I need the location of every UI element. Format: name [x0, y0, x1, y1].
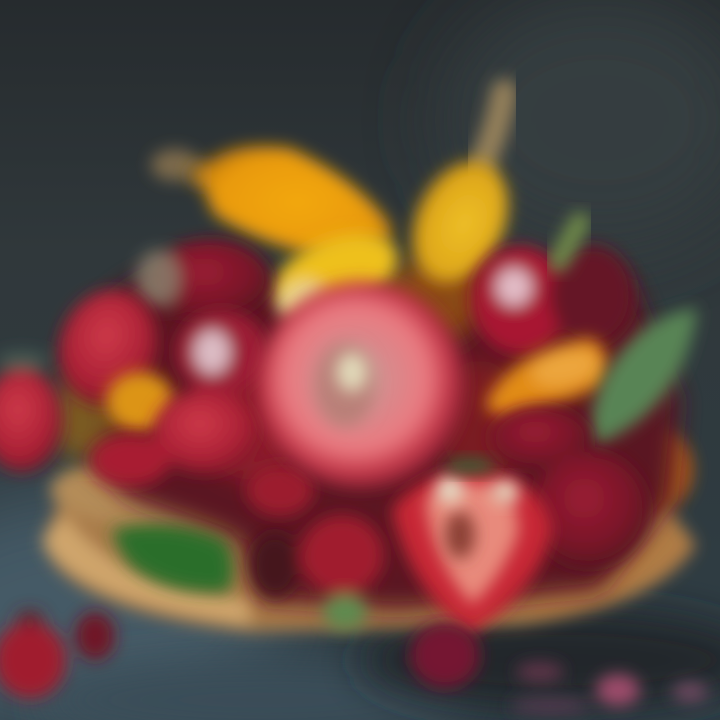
scattered pink petals, bottom right [510, 662, 708, 714]
wooden plate [42, 428, 696, 632]
cherries, lower centre [251, 515, 384, 630]
yellow slice [260, 217, 410, 333]
halved strawberry [392, 458, 552, 634]
lemon [393, 145, 527, 299]
dark red fruit, upper left [136, 240, 270, 320]
orange piece, left [106, 372, 174, 432]
left stem [151, 149, 199, 181]
banana stem [480, 92, 504, 168]
dark red berries, right [490, 406, 648, 568]
cherries, bottom [0, 610, 480, 698]
apple stem [558, 222, 580, 262]
halved pink fruit, centre [258, 281, 466, 489]
green leaf, lower left [112, 524, 233, 592]
fruit mass: dark maroon backing [50, 250, 680, 610]
green leaf, right [592, 308, 697, 445]
cherry cluster, centre-left [90, 310, 314, 516]
strawberries, left [0, 280, 169, 472]
red apple, right [472, 245, 634, 354]
mango [189, 146, 392, 258]
orange slice, right [485, 338, 608, 418]
